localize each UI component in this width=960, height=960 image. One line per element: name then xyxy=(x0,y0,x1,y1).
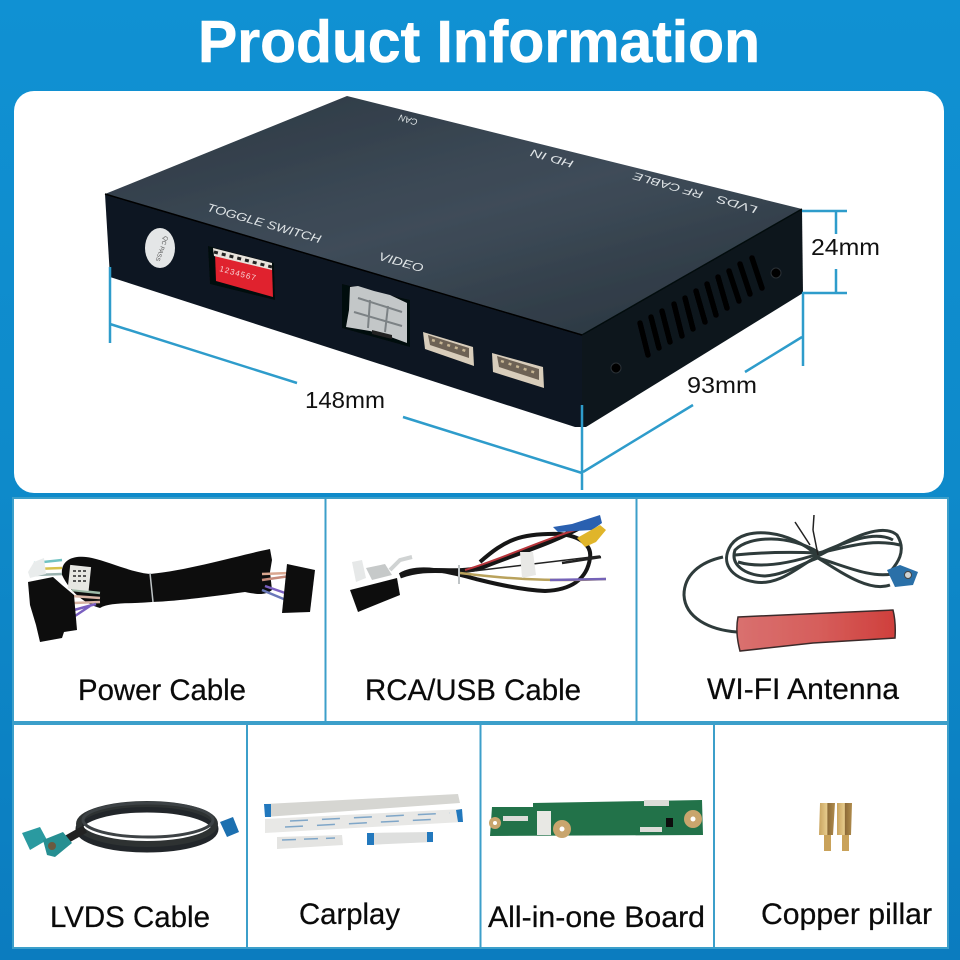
label: board: All-in-one Board xyxy=(488,901,705,934)
item: RCA USB cable xyxy=(350,515,606,707)
dimension lines xyxy=(110,211,847,490)
label: power cable: Power Cable xyxy=(78,674,246,707)
label: wifi antenna: WI-FI Antenna xyxy=(707,673,900,706)
item: power cable xyxy=(28,549,315,707)
item: all-in-one board xyxy=(488,800,705,934)
box side face xyxy=(582,209,803,427)
screws xyxy=(611,268,781,373)
item: LVDS cable xyxy=(22,803,239,934)
box front face xyxy=(105,194,582,427)
printed labels: CAN xyxy=(397,112,419,127)
connector 2 xyxy=(492,353,544,388)
vent slots xyxy=(640,258,762,355)
box top face xyxy=(105,96,802,335)
toggle switch xyxy=(208,246,275,300)
title: Product Information xyxy=(198,9,760,75)
label: RCA USB cable: RCA/USB Cable xyxy=(365,674,581,707)
printed labels: LVDS xyxy=(715,192,759,215)
video connector xyxy=(342,284,410,347)
dimension: height: 24mm xyxy=(811,234,880,260)
item: carplay ribbons xyxy=(264,794,463,931)
panel: accessories top row xyxy=(13,498,948,722)
sticker xyxy=(145,228,175,268)
dimension: width: 93mm xyxy=(687,372,757,398)
panel: device dimensions xyxy=(14,91,944,493)
device box xyxy=(105,96,803,427)
dimension: length: 148mm xyxy=(305,387,385,413)
connector 1 xyxy=(423,332,474,366)
item: copper pillars xyxy=(761,803,932,931)
printed labels: TOGGLE SWITCH xyxy=(205,202,323,246)
panel: accessories bottom row xyxy=(13,724,948,948)
label: carplay: Carplay xyxy=(299,898,400,931)
printed labels: HD IN xyxy=(529,146,575,170)
printed labels xyxy=(205,112,759,275)
printed labels: RF CABLE xyxy=(631,169,704,201)
toggle switch: 1234567 xyxy=(218,264,258,283)
item: wifi antenna xyxy=(684,515,918,706)
label: copper pillar: Copper pillar xyxy=(761,898,932,931)
label: LVDS cable: LVDS Cable xyxy=(50,901,210,934)
printed labels: VIDEO xyxy=(377,251,425,275)
sticker: QC PASS xyxy=(154,235,168,262)
